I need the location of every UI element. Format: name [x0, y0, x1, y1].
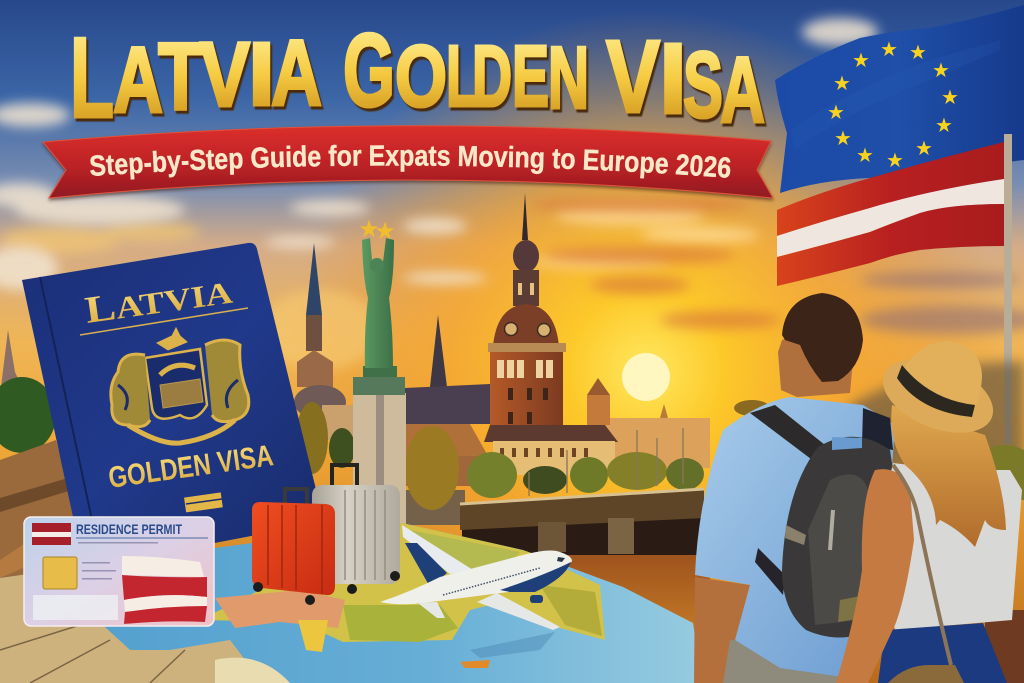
- EU stars: ★: [852, 48, 870, 72]
- silver suitcase: [312, 465, 400, 594]
- passport: [22, 243, 324, 568]
- man trousers: [723, 640, 840, 683]
- EU stars: ★: [941, 85, 959, 109]
- small flag: [32, 523, 71, 545]
- EU stars: ★: [909, 40, 927, 64]
- EU stars: ★: [856, 143, 874, 167]
- pedestal: [353, 393, 406, 538]
- distant city: [587, 378, 710, 468]
- EU stars: ★: [880, 37, 898, 61]
- Riga cathedral tower: [488, 193, 566, 428]
- title: A: [271, 20, 322, 125]
- title: A: [720, 37, 765, 142]
- EU stars: ★: [886, 148, 904, 172]
- EU stars: ★: [827, 100, 845, 124]
- couple: [694, 293, 1022, 683]
- statue: [362, 238, 394, 368]
- woman: [836, 341, 1022, 683]
- residence permit card: RESIDENCE PERMIT: [76, 521, 182, 537]
- title: D: [472, 28, 512, 125]
- EU stars: [827, 37, 959, 172]
- EU flag: [775, 5, 1024, 193]
- title: I: [248, 25, 275, 125]
- city trees: [296, 400, 770, 525]
- red suitcase: [252, 489, 335, 605]
- bridge: [460, 489, 704, 555]
- chip symbol: [184, 492, 223, 512]
- card chip: [43, 557, 77, 589]
- title: T: [158, 23, 203, 130]
- title: A: [113, 27, 163, 132]
- stars held by statue: ★: [374, 217, 396, 245]
- river: [440, 545, 710, 635]
- woman arm: [836, 469, 914, 683]
- woman jeans: [878, 623, 1007, 683]
- EU stars: ★: [833, 71, 851, 95]
- passport title: LATVIA: [82, 270, 236, 332]
- woman top: [875, 463, 1022, 630]
- left edge hill and trees: [0, 330, 80, 585]
- riverside buildings: [405, 424, 618, 486]
- stars held by statue: ★: [358, 215, 380, 243]
- title: L: [70, 15, 114, 142]
- man arm: [694, 577, 750, 683]
- title: V: [606, 19, 660, 134]
- title: [70, 13, 765, 142]
- ribbon subtitle: [41, 125, 775, 202]
- small spire: [430, 315, 447, 387]
- EU stars: ★: [834, 126, 852, 150]
- card flag: [122, 556, 207, 624]
- title: V: [200, 24, 250, 126]
- passport subtitle: GOLDEN VISA: [106, 439, 275, 495]
- man: [694, 293, 895, 683]
- cathedral nave roof: [405, 384, 490, 424]
- man shirt: [695, 397, 895, 678]
- EU stars: ★: [915, 136, 933, 160]
- title: L: [446, 28, 479, 125]
- title: E: [512, 28, 549, 125]
- Freedom Monument: [353, 215, 406, 538]
- map globe: [0, 520, 710, 683]
- Riga skyline: [294, 193, 770, 635]
- bag: [888, 665, 964, 683]
- stars held by statue: [358, 215, 396, 245]
- title: N: [548, 28, 589, 127]
- left church with spire: [294, 243, 356, 440]
- title: S: [683, 32, 723, 137]
- suitcases: [252, 465, 400, 605]
- flag pole: [1004, 134, 1012, 444]
- man head: [778, 330, 853, 397]
- title: O: [395, 28, 447, 125]
- right side distant trees: [850, 362, 1024, 683]
- title: G: [343, 13, 395, 129]
- title: I: [659, 23, 687, 135]
- Latvia flag: [777, 142, 1004, 286]
- coat of arms: [111, 328, 249, 443]
- backpack: [750, 405, 893, 638]
- EU stars: ★: [935, 113, 953, 137]
- residence permit card: [24, 517, 214, 626]
- EU stars: ★: [932, 58, 950, 82]
- sun: [622, 353, 670, 401]
- straw hat: [872, 341, 1004, 447]
- ribbon subtitle: Step-by-Step Guide for Expats Moving to Europe 2026: [90, 144, 730, 180]
- bag strap: [893, 465, 951, 665]
- woman hair: [891, 405, 1006, 547]
- airplane: [380, 525, 572, 630]
